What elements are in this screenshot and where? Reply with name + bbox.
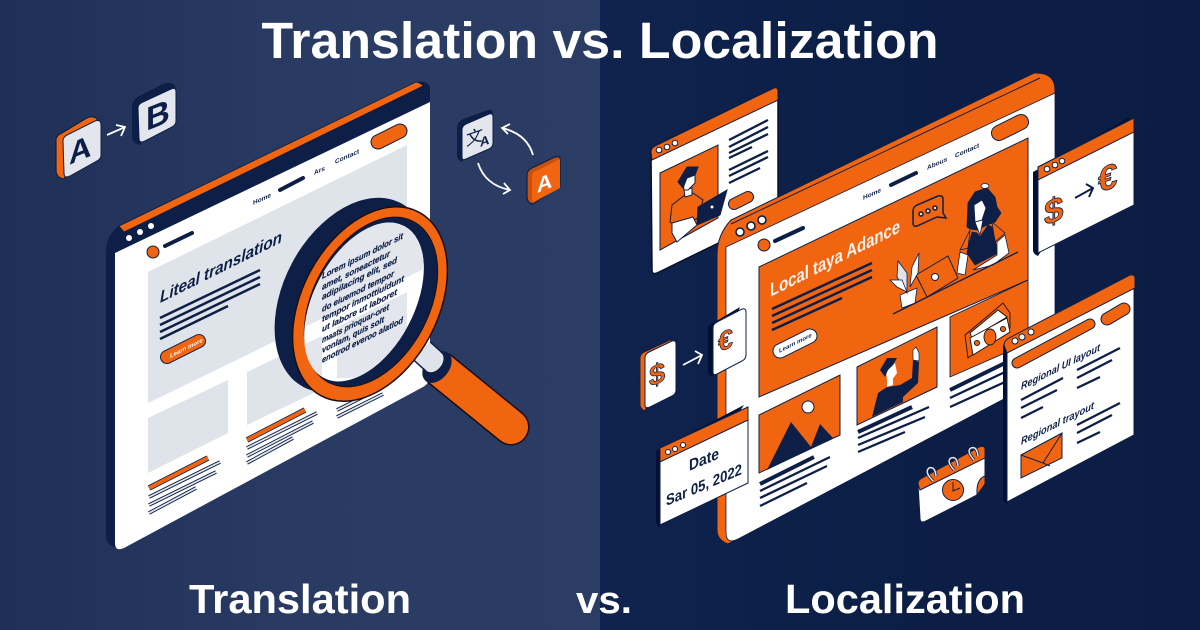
- window dots: [736, 216, 766, 236]
- right arm: [973, 235, 1009, 270]
- icon: A to B tiles: [56, 83, 176, 179]
- arms: [672, 217, 697, 242]
- learn more button: Learn more: [170, 337, 203, 360]
- hair: [678, 167, 698, 188]
- lens text: adipilacing elit, sed: [322, 255, 397, 302]
- clock: [942, 480, 964, 500]
- neck: [684, 188, 692, 197]
- calendar header: [918, 446, 985, 490]
- handle: [441, 370, 511, 427]
- neck: [975, 220, 983, 235]
- icon: A to B tiles: A: [69, 128, 91, 172]
- heading: Regional UI layout: Regional UI layout: [1021, 341, 1101, 393]
- lens page view: [304, 222, 424, 378]
- face: [974, 200, 986, 222]
- shirt: [670, 193, 703, 228]
- card copy lines fill: [149, 387, 383, 513]
- rim inside: [277, 194, 465, 410]
- hair: [967, 188, 1001, 230]
- label: vs.: vs.: [576, 580, 632, 622]
- woman at laptop: [957, 184, 1009, 275]
- label: Localization: Localization: [785, 576, 1025, 622]
- pot: [900, 288, 917, 308]
- logo: [758, 228, 803, 251]
- icon: A to B tiles: B: [146, 93, 170, 139]
- panel: localization background: [600, 0, 1200, 630]
- hero placeholder: [148, 145, 407, 403]
- lens text: tempor inmottiuidunt: [322, 273, 405, 324]
- page body: [726, 93, 1055, 541]
- header: [1004, 275, 1135, 353]
- left sleeve: [960, 230, 970, 250]
- orange rim: [261, 180, 479, 428]
- icon: magnifying glass: [274, 198, 530, 446]
- window dots: [126, 223, 154, 241]
- nav: [863, 142, 980, 202]
- left arm: [957, 252, 968, 275]
- date label: Date: [689, 444, 719, 475]
- ferrule: [421, 348, 447, 376]
- lens text: ut labore ut laboret: [322, 287, 398, 334]
- potted plant: [890, 253, 919, 308]
- hero copy lines: [772, 263, 872, 330]
- calendar page: [918, 448, 985, 522]
- frame highlight: [731, 78, 1040, 224]
- laptop logo: [710, 205, 714, 209]
- copy lines: [1021, 348, 1120, 443]
- euro sign: €: [1098, 154, 1117, 201]
- icon: translate cycle tiles: [457, 110, 560, 204]
- nav: Home: [253, 192, 271, 207]
- hero copy lines: [160, 270, 260, 339]
- panel: literal translation webpage: [106, 82, 430, 549]
- learn more button: Learn more: [779, 332, 812, 355]
- window back: [656, 405, 744, 527]
- panel: date format window: [656, 405, 748, 527]
- icon: translate cycle tiles: 文: [466, 125, 483, 150]
- button: [1107, 309, 1124, 319]
- icon: envelope: [1021, 433, 1062, 478]
- speech bubble: [913, 196, 946, 226]
- low leaf: [890, 280, 907, 292]
- left leaf: [897, 261, 907, 293]
- hero headline: Liteal translation: [160, 227, 282, 307]
- dollar sign: $: [1044, 187, 1063, 234]
- image card: [759, 375, 840, 473]
- dress: [967, 225, 998, 265]
- window header: [651, 88, 778, 160]
- icon: dollar to euro tiles: $: [649, 356, 666, 394]
- binder rings: [927, 448, 978, 481]
- window body: [1038, 118, 1134, 253]
- person with laptop: [670, 167, 727, 242]
- lens text: vonlam, quis solt: [322, 314, 385, 355]
- icon: translate cycle tiles: A: [537, 168, 552, 198]
- person card: [857, 327, 937, 425]
- money card: [950, 280, 1028, 377]
- orange frame: [717, 73, 1055, 544]
- lens text: maats prioquar-oret: [322, 302, 390, 345]
- window back: [1033, 117, 1130, 256]
- nav: [253, 148, 360, 207]
- icon: dollar to euro tiles: [640, 307, 746, 411]
- face: [683, 173, 695, 190]
- logo: [147, 233, 192, 258]
- dots: [1012, 329, 1034, 344]
- panel: regional layout window: [1003, 275, 1135, 504]
- shelf: [893, 252, 1018, 314]
- panel: small profile window: [651, 88, 778, 274]
- lens text: [322, 231, 405, 365]
- lens text: do eiuemod tempor: [322, 268, 394, 314]
- panel: translation background: [0, 0, 600, 630]
- icon: dollar to euro tiles: €: [718, 322, 733, 358]
- nav: Contact: [955, 142, 980, 160]
- lens: [279, 203, 449, 401]
- laptop: [916, 256, 958, 297]
- icon: translate cycle tiles: A: [480, 132, 490, 150]
- hair bun: [981, 184, 989, 188]
- copy lines: [729, 120, 768, 183]
- collar: [416, 345, 458, 389]
- handle fill: [441, 370, 511, 427]
- nav button: [378, 131, 400, 142]
- button fill: [378, 131, 400, 142]
- laptop: [697, 190, 727, 225]
- nav: Abous: [927, 156, 947, 172]
- page curl: [977, 476, 985, 495]
- lens text: enotrod everoo alatlod: [322, 315, 403, 365]
- nav: Home: [863, 187, 881, 202]
- arrow: [1075, 184, 1093, 198]
- window body: [1007, 278, 1134, 502]
- title: Translation vs. Localization: [262, 12, 939, 69]
- window body: [660, 407, 748, 525]
- button: [734, 197, 748, 204]
- dots: [666, 442, 686, 454]
- panel: currency conversion window: [1033, 117, 1134, 256]
- right leaf: [910, 253, 919, 287]
- nav: Ars: [314, 165, 325, 177]
- card copy lines outline: [149, 387, 383, 513]
- header: [660, 407, 748, 462]
- portrait panel: [660, 145, 718, 250]
- window back: [1003, 275, 1130, 504]
- orange bar: [1017, 324, 1090, 363]
- page body: [115, 102, 430, 549]
- nav button: [999, 122, 1021, 133]
- card heading fills: [149, 410, 305, 488]
- right sleeve: [992, 222, 1005, 242]
- orange top strip: [119, 82, 423, 232]
- window body: [651, 88, 778, 274]
- window dots: [656, 140, 678, 153]
- dots: [1044, 158, 1065, 172]
- card copy lines: [760, 363, 1005, 506]
- hero headline: Local taya Adance: [770, 216, 900, 302]
- card placeholders: [148, 292, 407, 473]
- card headings: [149, 410, 305, 488]
- rim back: [243, 171, 461, 419]
- label: Translation: Translation: [189, 576, 411, 622]
- lens text: amet, soneactetur: [322, 248, 390, 292]
- lens text: Lorem ipsum dolor sit: [322, 231, 404, 281]
- heading: Regional trayout: Regional trayout: [1021, 399, 1095, 448]
- date value: Sar 05, 2022: [666, 461, 742, 510]
- hero panel: [759, 138, 1028, 397]
- panel: localized webpage: [717, 73, 1055, 544]
- browser frame: [106, 82, 430, 548]
- header: [1038, 118, 1134, 180]
- icon: calendar with clock: [918, 446, 985, 522]
- nav: Contact: [335, 148, 360, 166]
